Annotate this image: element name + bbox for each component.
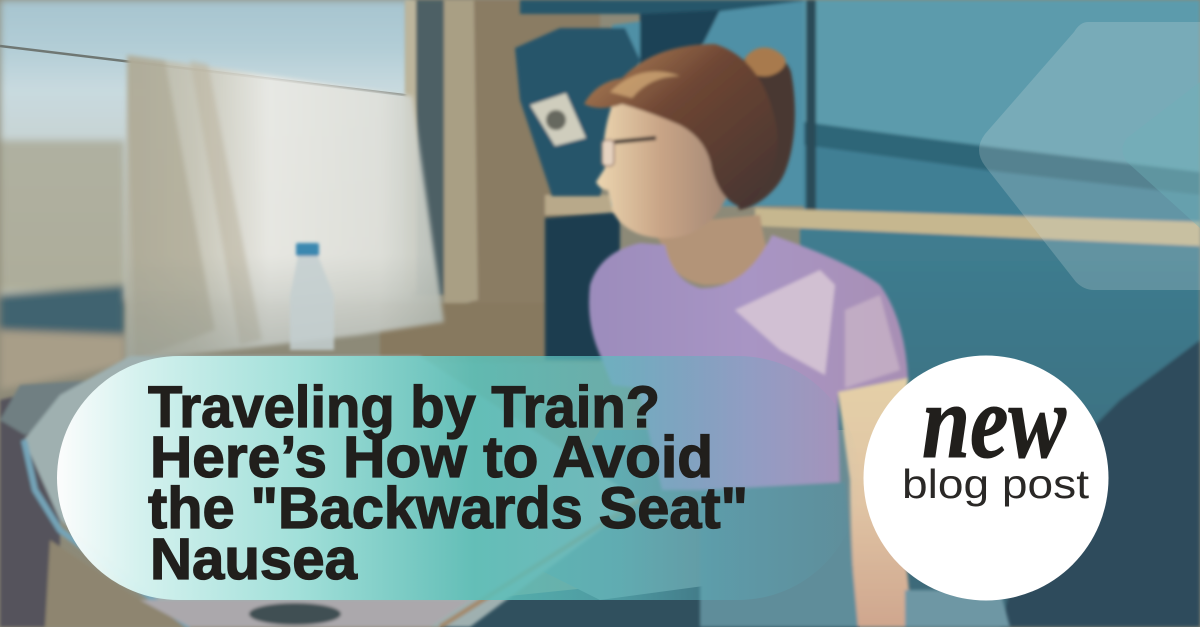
seat panels	[515, 0, 1200, 627]
neck	[650, 215, 772, 285]
title: the "Backwards Seat"	[148, 476, 748, 541]
hair bun	[733, 51, 795, 210]
title: Here’s How to Avoid	[150, 425, 713, 490]
arm	[838, 378, 912, 627]
water bottle	[290, 243, 334, 350]
jeans	[700, 482, 858, 627]
t-shirt	[589, 235, 908, 490]
title banner pill	[57, 356, 860, 600]
dark lower cabin	[440, 560, 860, 627]
face	[596, 90, 740, 238]
title	[148, 375, 748, 592]
badge: new blog post	[864, 356, 1108, 600]
badge: new blog post: new	[922, 363, 1067, 480]
window	[0, 0, 412, 390]
hair highlight	[610, 72, 680, 98]
badge: new blog post: blog post	[902, 461, 1090, 507]
woman	[584, 44, 1010, 627]
table and left foreground	[0, 356, 640, 627]
glasses	[614, 138, 656, 142]
window frame and wall	[380, 0, 615, 363]
title: Traveling by Train?	[148, 375, 660, 440]
chevron decoration	[979, 22, 1200, 290]
hair	[584, 44, 778, 208]
title: Nausea	[150, 527, 358, 592]
curtain rod	[0, 46, 412, 96]
curtain	[125, 55, 444, 362]
